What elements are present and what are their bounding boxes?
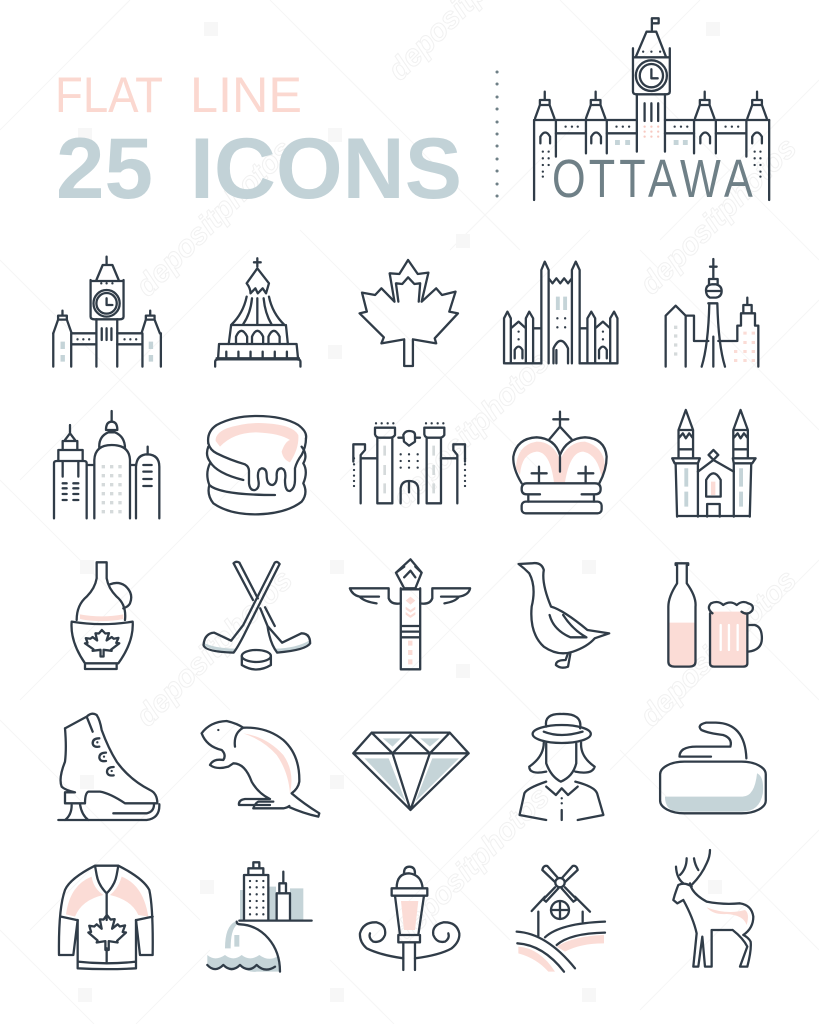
header icon: Parliament building: [534, 18, 769, 200]
icon: diamond: [353, 733, 469, 810]
title: 25 ICONS: 25: [56, 121, 153, 217]
icon: totem pole: [350, 559, 470, 669]
title: FLAT LINE: LINE: [190, 67, 302, 123]
icon: windmill on hills: [517, 866, 605, 972]
icon: waterfall and city: [207, 862, 312, 972]
icon: street lamp: [360, 867, 459, 970]
dotted divider: [496, 72, 499, 196]
icon: hockey sticks and puck: [204, 562, 310, 669]
icon: CN tower skyline: [666, 259, 758, 367]
icon: hockey jersey: [59, 866, 153, 969]
title: 25 ICONS: ICONS: [190, 121, 462, 217]
watermark background: depositphotos: [130, 133, 299, 303]
icon: maple leaf: [360, 260, 458, 366]
icon: beaver: [202, 721, 319, 817]
icons in rows 1-2 drawn on shared grid: [53, 257, 756, 517]
icon: deer: [673, 850, 753, 967]
watermark background: depositphotos: [130, 563, 299, 733]
icon: gothic church: [672, 410, 756, 517]
icon: maple syrup bottle: [71, 562, 133, 669]
icon: curling stone: [660, 723, 766, 813]
icon: castle: [353, 423, 465, 503]
icon: beer bottle and mug: [668, 563, 762, 667]
icon: goose: [519, 563, 609, 668]
watermark background: depositphotos: [634, 563, 803, 733]
icon: crown: [513, 412, 607, 513]
icon: parliament tower: [53, 257, 161, 367]
header label: OTTAWA: OTTAWA: [552, 150, 753, 209]
title: FLAT LINE: [55, 67, 302, 123]
icon: dome: [215, 258, 300, 367]
icon: cathedral: [504, 262, 617, 363]
title: FLAT LINE: FLAT: [55, 67, 163, 123]
icon: pancakes with syrup: [207, 416, 306, 514]
title: 25 ICONS: [56, 121, 462, 217]
icon: woman with hat: [520, 714, 603, 820]
icon: downtown skyline: [54, 411, 159, 518]
watermark background: depositphotos: [387, 345, 556, 515]
icons in rows 3-4 drawn on shared grid: [204, 559, 766, 820]
watermark background: depositphotos: [634, 131, 803, 301]
icon: ice skate: [58, 714, 159, 820]
watermark background: depositphotos: [387, 780, 556, 950]
